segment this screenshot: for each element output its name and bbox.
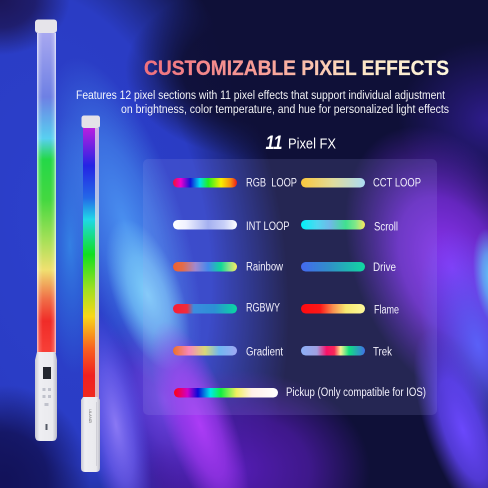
display screen [43,367,51,379]
bar: Gradient [173,346,237,356]
label: RGB LOOP: RGB LOOP [246,178,297,190]
tube handle [35,352,57,441]
label: Trek: Trek [373,347,392,359]
bar: RGBWY [173,304,237,314]
long light tube [35,20,57,441]
bar: Pickup [174,388,278,398]
bar: Rainbow [173,262,237,272]
bar: Flame [301,304,365,314]
tube glass edge [95,128,99,398]
control buttons [42,388,51,406]
label: Rainbow: Rainbow [246,262,284,274]
panel: pixel FX list [143,159,437,415]
tube glow [37,33,56,353]
label: RGBWY: RGBWY [246,303,280,315]
bar: Drive [301,262,365,272]
bar: Scroll [301,220,365,230]
bar: CCT LOOP [301,178,365,188]
bar: RGB LOOP [173,178,237,188]
USB port [46,424,48,430]
subheading: 11 Pixel FX [266,133,336,154]
subheading: 11 Pixel FX: 11 [266,133,282,154]
label: Gradient: Gradient [246,347,284,359]
short light tube [81,116,100,472]
description text [76,88,449,116]
tube handle [81,397,100,472]
handle seam [96,402,97,466]
brand mark: ULANZI [88,409,93,423]
tube glow [83,128,99,398]
tube cap [35,20,57,33]
bar: INT LOOP [173,220,237,230]
label: INT LOOP: INT LOOP [246,221,290,233]
label: Pickup: Pickup (Only compatible for IOS) [286,387,426,399]
subheading: 11 Pixel FX: Pixel FX [288,136,336,152]
label: Scroll: Scroll [374,222,398,234]
label: Drive: Drive [373,262,396,274]
tube glass edges [37,33,56,353]
tube cap [82,116,100,128]
label: CCT LOOP: CCT LOOP [373,178,421,190]
title: CUSTOMIZABLE PIXEL EFFECTS [144,57,449,80]
bar: Trek [301,346,365,356]
label: Flame: Flame [374,304,399,316]
